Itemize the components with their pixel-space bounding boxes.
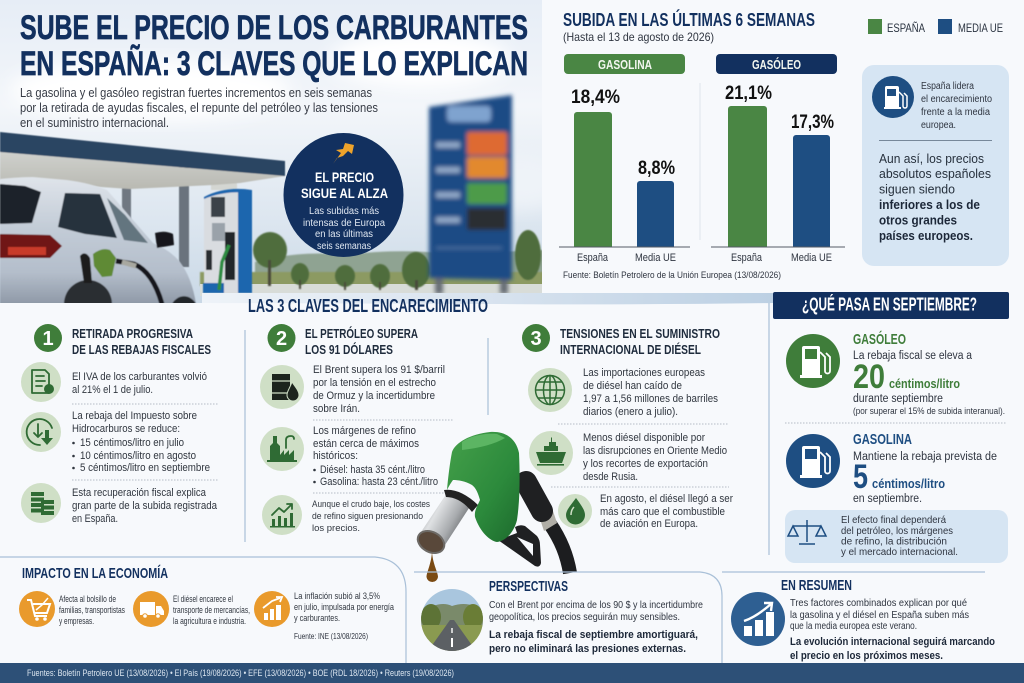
icon: inflation chart [254,591,290,627]
info box: inferiores a los de [879,197,980,212]
bar chart: gasolina: 18,4% [571,87,620,108]
callout: el precio sigue al alza: SIGUE AL ALZA [301,185,388,201]
panel: clave 3: desde Rusia. [583,471,638,483]
panel: clave 3: las disrupciones en Oriente Medio [583,445,727,457]
icon: blue fuel pump [786,434,840,488]
legend: ESPAÑA [887,21,925,35]
bar chart: gasolina: España [577,252,609,264]
intro text: por la retirada de ayudas fiscales, el repunte del petróleo y las tensiones [20,101,378,115]
callout: el precio sigue al alza: EL PRECIO [315,169,374,185]
icon: shopping cart [19,591,55,627]
panel: perspectivas: geopolítica, los precios seguirán muy sensibles. [489,612,680,623]
hose [550,524,570,573]
info box: siguen siendo [879,182,955,196]
panel: clave 2: históricos: [313,450,358,462]
panel: clave 3 [522,324,733,530]
panel: en resumen: el precio en los próximos meses. [790,650,943,662]
callout: efecto final: El efecto final dependerá [841,515,946,526]
icon: globe [528,368,572,412]
footer sources bar: Fuentes: Boletín Petrolero UE (13/08/2026) • El País (19/08/2026) • EFE (13/08/2026) • BOE (RDL 18/2026) • Reuters (19/08/2026) [27,668,454,679]
panel: septiembre: durante septiembre [853,393,943,405]
callout: el precio sigue al alza [284,133,404,257]
panel: clave 1: en España. [72,513,118,525]
number badge 2: 2 [276,328,287,350]
panel: septiembre: La rebaja fiscal se eleva a [853,350,973,362]
info box: otros grandes [879,212,957,228]
panel: impacto en la economia: en julio, impulsada por energía [294,602,395,613]
panel: impacto en la economia: y empresas. [59,616,94,626]
icon: fuel drop [558,494,592,528]
panel: septiembre: GASÓLEO [853,330,906,348]
panel: clave 1: 5 céntimos/litro en septiembre [80,462,210,474]
bar chart: gasoleo: GASÓLEO [752,57,801,72]
panel: perspectivas: pero no eliminará las presiones externas. [489,643,686,655]
panel: impacto en la economia [0,557,406,663]
callout: efecto final: de refino, la distribución [841,536,947,548]
panel: clave 2: de refino siguen presionando [312,511,423,521]
pump [203,189,252,293]
panel: en resumen: La evolución internacional seguirá marcando [790,636,995,648]
icon: cargo ship [529,431,573,475]
panel: perspectivas: La rebaja fiscal de septiembre amortiguará, [489,629,698,641]
icon: rising chart [262,495,302,535]
intro text: La gasolina y el gasóleo registran fuertes incrementos en seis semanas [20,86,372,100]
panel: perspectivas: PERSPECTIVAS [489,579,568,595]
panel: en resumen: la gasolina y el diésel en España suben más [790,610,969,621]
panel: clave 1: Esta recuperación fiscal explica [72,487,206,499]
info box: países europeos. [879,228,973,243]
info box [862,65,1009,266]
panel: en resumen: que la media europea este verano. [790,621,917,632]
price sign [429,95,512,294]
icon: downward arrows [21,412,61,452]
panel: impacto en la economia: familias, transportistas [59,605,125,615]
panel: en resumen: EN RESUMEN [781,578,852,594]
bar chart: gasolina: Media UE [635,252,676,264]
panel: clave 2: por la tensión en el estrecho [313,377,436,389]
panel: clave 3: INTERNACIONAL DE DIÉSEL [560,342,701,357]
panel: clave 2: Los márgenes de refino [313,425,416,437]
panel: septiembre: céntimos/litro [889,376,960,391]
panel: clave 2: LOS 91 DÓLARES [305,342,393,357]
icon: tax document [21,362,61,402]
panel: septiembre: 20 [853,358,885,396]
callout: el precio sigue al alza: intensas de Europa [303,218,385,229]
panel: septiembre: en septiembre. [853,493,922,505]
callout: el precio sigue al alza: seis semanas [317,241,371,252]
chart heading [563,9,815,44]
callout: efecto final [785,510,1008,563]
number badge 2 [268,324,296,352]
panel: clave 1: La rebaja del Impuesto sobre [72,410,197,422]
panel: clave 3: 1,97 a 1,56 millones de barriles [583,393,719,405]
callout: el precio sigue al alza: Las subidas más [309,206,379,217]
panel: clave 2: están cerca de máximos [313,438,420,450]
oil drop [426,552,438,582]
panel: clave 2 [260,324,454,535]
icon: coin stacks [21,483,61,523]
road photo [421,589,483,651]
panel: clave 2: El Brent supera los 91 $/barril [313,364,445,376]
icon: scales [788,520,826,544]
panel: impacto en la economia: transporte de mercancías, [173,605,250,615]
icon: growth chart [731,592,785,646]
panel: impacto en la economia: y carburantes. [294,613,340,624]
info box: el encarecimiento [921,94,992,105]
icon: fuel pump [872,76,914,118]
intro text [20,86,378,130]
panel: clave 3: y los recortes de exportación [583,458,708,470]
photo: petrol station with car [0,0,570,304]
title: SUBE EL PRECIO DE LOS CARBURANTES [20,9,528,47]
panel: clave 2: de Ormuz y la incertidumbre [313,390,435,402]
bar chart: gasoleo: España [731,252,763,264]
bar chart: gasolina [559,54,690,264]
info box: absolutos españoles [879,166,991,181]
chart source: Fuente: Boletín Petrolero de la Unión Europea (13/08/2026) [563,270,781,280]
icon: green fuel pump [786,334,840,388]
heading: que pasa en septiembre [773,292,1009,319]
panel: clave 1: 10 céntimos/litro en agosto [80,450,196,462]
panel: impacto en la economia: Fuente: INE (13/08/2026) [294,632,368,641]
legend: MEDIA UE [958,21,1003,35]
panel: impacto en la economia: IMPACTO EN LA ECONOMÍA [22,565,168,582]
panel: clave 3: más caro que el combustible [600,506,725,518]
panel: clave 2: EL PETRÓLEO SUPERA [305,326,418,341]
panel: impacto en la economia: El diésel encarece el [173,594,233,604]
panel: perspectivas: Con el Brent por encima de los 90 $ y la incertidumbre [489,600,703,611]
chart heading: SUBIDA EN LAS ÚLTIMAS 6 SEMANAS [563,9,815,30]
info box: España lidera [921,81,974,92]
callout: el precio sigue al alza: en las últimas [315,229,373,240]
heading: las 3 claves: LAS 3 CLAVES DEL ENCARECIMIENTO [248,296,488,316]
steel spout [419,493,471,548]
icon: oil barrel [260,365,304,409]
car [0,177,196,304]
panel: clave 1: al 21% el 1 de julio. [72,384,153,396]
fuel nozzle illustration [414,432,570,582]
panel: clave 1: gran parte de la subida registrada [72,500,217,512]
panel: clave 2: Aunque el crudo baje, los costes [312,499,430,509]
panel: clave 2: los precios. [312,523,360,533]
bar chart: gasoleo: 17,3% [791,112,834,133]
panel: clave 2: Gasolina: hasta 23 cént./litro [320,476,438,488]
panel: septiembre: GASOLINA [853,431,912,448]
info box: frente a la media [921,107,990,118]
panel: septiembre: Mantiene la rebaja prevista de [853,451,997,463]
panel: impacto en la economia: la agricultura e industria. [173,616,246,626]
panel: clave 1: Hidrocarburos se reduce: [72,423,180,435]
panel: clave 3: En agosto, el diésel llegó a ser [600,493,733,505]
panel: perspectivas [414,572,722,663]
panel: clave 1: El IVA de los carburantes volvió [72,371,207,383]
icon: refinery [260,427,304,471]
icon: truck [133,591,169,627]
bar chart: gasoleo [711,54,845,264]
trigger guard [498,525,541,567]
panel: septiembre: 5 [853,458,868,496]
callout: efecto final: del petróleo, los márgenes [841,526,953,537]
panel: subida en las ultimas 6 semanas [542,0,1024,293]
icon: rising arrow [333,143,354,164]
bar chart: gasoleo: 21,1% [725,83,772,104]
panel: impacto en la economia: Afecta al bolsillo de [59,594,116,604]
panel: clave 1: RETIRADA PROGRESIVA [72,326,193,341]
canopy [0,132,285,267]
panel: en resumen [722,572,995,662]
bar chart: gasolina: 8,8% [638,158,675,179]
panel: septiembre: céntimos/litro [872,476,945,491]
panel: septiembre [773,292,1009,563]
bar chart: gasoleo: Media UE [791,252,832,264]
number badge 1: 1 [42,328,54,350]
info box: europea. [921,120,956,131]
legend [868,19,1003,35]
trees [253,230,541,290]
chart heading: (Hasta el 13 de agosto de 2026) [563,30,714,44]
handle [526,482,542,511]
panel: clave 3: diarios (enero a julio). [583,406,678,418]
number badge 3 [522,324,550,352]
panel: clave 3: de aviación en Europa. [600,518,698,530]
panel: impacto en la economia: La inflación subió al 3,5% [294,591,380,602]
section band [202,293,773,304]
panel: clave 2: Diésel: hasta 35 cént./litro [320,464,425,476]
title [20,9,528,83]
green body [447,432,520,542]
number badge 3: 3 [530,328,542,350]
title: EN ESPAÑA: 3 CLAVES QUE LO EXPLICAN [20,44,528,83]
bar chart: gasolina: GASOLINA [598,57,652,72]
panel: septiembre: (por superar el 15% de subida interanual). [853,406,1005,416]
hills [254,249,542,273]
panel: clave 3: Menos diésel disponible por [583,432,705,444]
panel: clave 1: DE LAS REBAJAS FISCALES [72,342,211,357]
footer sources bar [0,663,1024,683]
callout: efecto final: y el mercado internacional. [841,547,958,558]
info box: Aun así, los precios [879,151,984,166]
number badge 1 [34,324,62,352]
intro text: en el suministro internacional. [20,116,169,130]
panel: clave 1 [21,324,218,525]
panel: en resumen: Tres factores combinados explican por qué [790,598,967,609]
panel: clave 3: Las importaciones europeas [583,367,706,379]
panel: clave 1: 15 céntimos/litro en julio [80,437,184,449]
panel: clave 3: TENSIONES EN EL SUMINISTRO [560,326,720,341]
panel: clave 2: sobre Irán. [313,403,360,415]
panel: clave 3: de diésel han caído de [583,380,682,392]
